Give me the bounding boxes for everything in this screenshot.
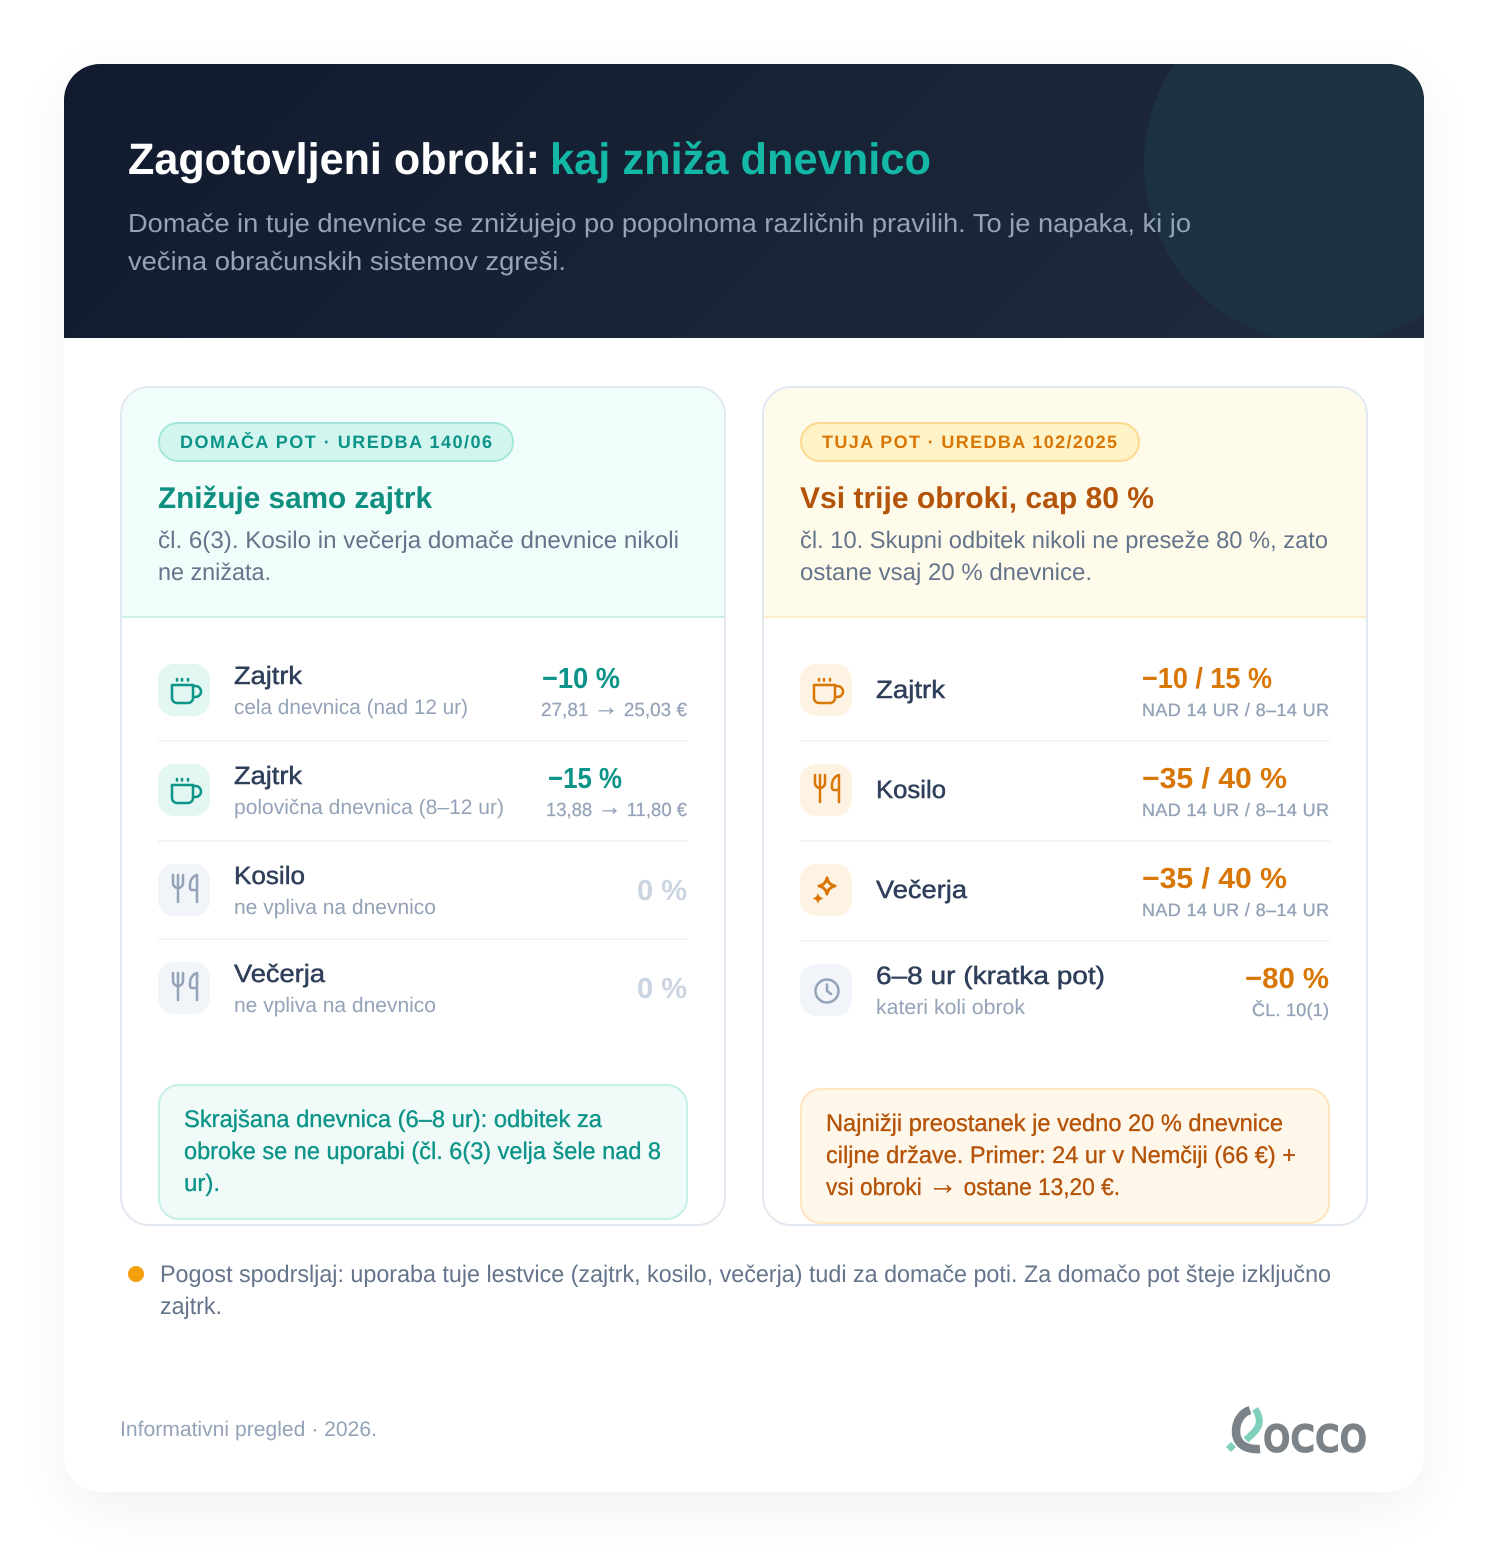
badge: domestic: DOMAČA POT · UREDBA 140/06 — [180, 431, 492, 452]
callout: minimum remainder: Najnižji preostanek je vedno 20 % dnevnice — [826, 1110, 1283, 1137]
row: dinner: ne vpliva na dnevnico — [234, 994, 436, 1017]
row: lunch: ne vpliva na dnevnico — [234, 896, 436, 919]
row: dinner — [158, 960, 687, 1017]
icon: cutlery — [158, 864, 210, 916]
icon: cup — [800, 664, 852, 716]
row: breakfast half day — [158, 762, 687, 821]
row: breakfast full day: cela dnevnica (nad 12 ur) — [234, 696, 468, 719]
row: dinner: NAD 14 UR / 8–14 UR — [1142, 900, 1329, 920]
description: domestic: čl. 6(3). Kosilo in večerja domače dnevnice nikoli — [158, 527, 679, 554]
title: kaj zniža dnevnico — [550, 135, 931, 184]
icon: sparkles — [800, 864, 852, 916]
callout: minimum remainder: ciljne države. Primer: 24 ur v Nemčiji (66 €) + — [826, 1142, 1296, 1169]
row: lunch: 0 % — [637, 875, 687, 907]
row: lunch: NAD 14 UR / 8–14 UR — [1142, 800, 1329, 820]
row: breakfast: Zajtrk — [876, 676, 946, 704]
row: short trip: kateri koli obrok — [876, 996, 1026, 1019]
heading: domestic: Znižuje samo zajtrk — [158, 482, 432, 515]
row: breakfast full day — [158, 662, 687, 721]
callout: short allowance: obroke se ne uporabi (čl. 6(3) velja šele nad 8 — [184, 1138, 661, 1165]
row: breakfast half day: Zajtrk — [234, 762, 303, 790]
row: lunch: Kosilo — [876, 776, 946, 804]
callout: short allowance: ur). — [184, 1170, 220, 1197]
callout: short allowance: Skrajšana dnevnica (6–8 ur): odbitek za — [184, 1106, 603, 1133]
description: foreign — [800, 527, 1328, 586]
callout: minimum remainder: ostane 13,20 €. — [957, 1174, 1120, 1201]
description: foreign: čl. 10. Skupni odbitek nikoli ne preseže 80 %, zato — [800, 527, 1328, 554]
row: breakfast full day: −10 % — [542, 663, 620, 695]
header banner: večina obračunskih sistemov zgreši. — [128, 246, 566, 276]
row: short trip — [800, 962, 1329, 1020]
row: lunch — [158, 862, 687, 919]
row: breakfast half day: → — [597, 793, 622, 821]
description: domestic: ne znižata. — [158, 559, 271, 586]
row: breakfast full day: → — [594, 693, 619, 721]
row: breakfast half day: polovična dnevnica (8–12 ur) — [234, 796, 504, 819]
callout: minimum remainder: → — [928, 1166, 957, 1201]
row: breakfast full day: 27,81 — [541, 700, 589, 721]
row: short trip: −80 % — [1245, 963, 1329, 995]
row: dinner: −35 / 40 % — [1142, 863, 1287, 895]
header banner: Domače in tuje dnevnice se znižujejo po popolnoma različnih pravilih. To je napaka, ki jo — [128, 208, 1191, 238]
icon: cutlery — [158, 962, 210, 1014]
panel: domestic trip — [121, 387, 725, 1225]
row: breakfast half day: −15 % — [548, 763, 622, 795]
icon: cup — [158, 764, 210, 816]
heading: foreign: Vsi trije obroki, cap 80 % — [800, 482, 1154, 515]
row: breakfast full day: Zajtrk — [234, 662, 303, 690]
row: breakfast: −10 / 15 % — [1142, 663, 1272, 695]
row: breakfast full day: 25,03 € — [619, 700, 687, 721]
row: lunch: Kosilo — [234, 862, 305, 890]
row: lunch: −35 / 40 % — [1142, 763, 1287, 795]
callout: short allowance — [159, 1085, 687, 1219]
icon: clock — [800, 964, 852, 1016]
badge: domestic — [159, 423, 513, 461]
header banner — [64, 64, 1424, 338]
badge: foreign: TUJA POT · UREDBA 102/2025 — [822, 432, 1117, 452]
row: lunch — [800, 763, 1329, 820]
row: dinner: 0 % — [637, 973, 687, 1005]
icon: cutlery — [800, 764, 852, 816]
row: dinner: Večerja — [876, 876, 967, 904]
note: common mistake: zajtrk. — [160, 1293, 222, 1320]
row: short trip: 6–8 ur (kratka pot) — [876, 962, 1105, 990]
footer text: Informativni pregled · 2026. — [120, 1418, 377, 1441]
row: dinner: Večerja — [234, 960, 325, 988]
callout: minimum remainder — [801, 1089, 1329, 1223]
row: breakfast half day: 11,80 € — [622, 800, 687, 821]
note: common mistake: Pogost spodrsljaj: uporaba tuje lestvice (zajtrk, kosilo, večerja) tudi za domače poti. Za domačo pot šteje izključno — [160, 1261, 1331, 1288]
row: dinner — [800, 863, 1329, 920]
row: breakfast: NAD 14 UR / 8–14 UR — [1142, 700, 1329, 720]
description: domestic — [158, 527, 679, 586]
title: Zagotovljeni obroki: — [128, 135, 540, 184]
panel: foreign trip — [763, 387, 1367, 1225]
row: breakfast half day: 13,88 — [546, 800, 594, 821]
note: common mistake — [128, 1261, 1331, 1320]
icon: cup — [158, 664, 210, 716]
callout: minimum remainder: vsi obroki — [826, 1174, 927, 1201]
row: short trip: ČL. 10(1) — [1252, 1000, 1329, 1020]
row: breakfast — [800, 663, 1329, 720]
title — [128, 135, 931, 184]
logo: occo — [1263, 1408, 1367, 1463]
description: foreign: ostane vsaj 20 % dnevnice. — [800, 559, 1092, 586]
badge: foreign — [801, 423, 1139, 461]
